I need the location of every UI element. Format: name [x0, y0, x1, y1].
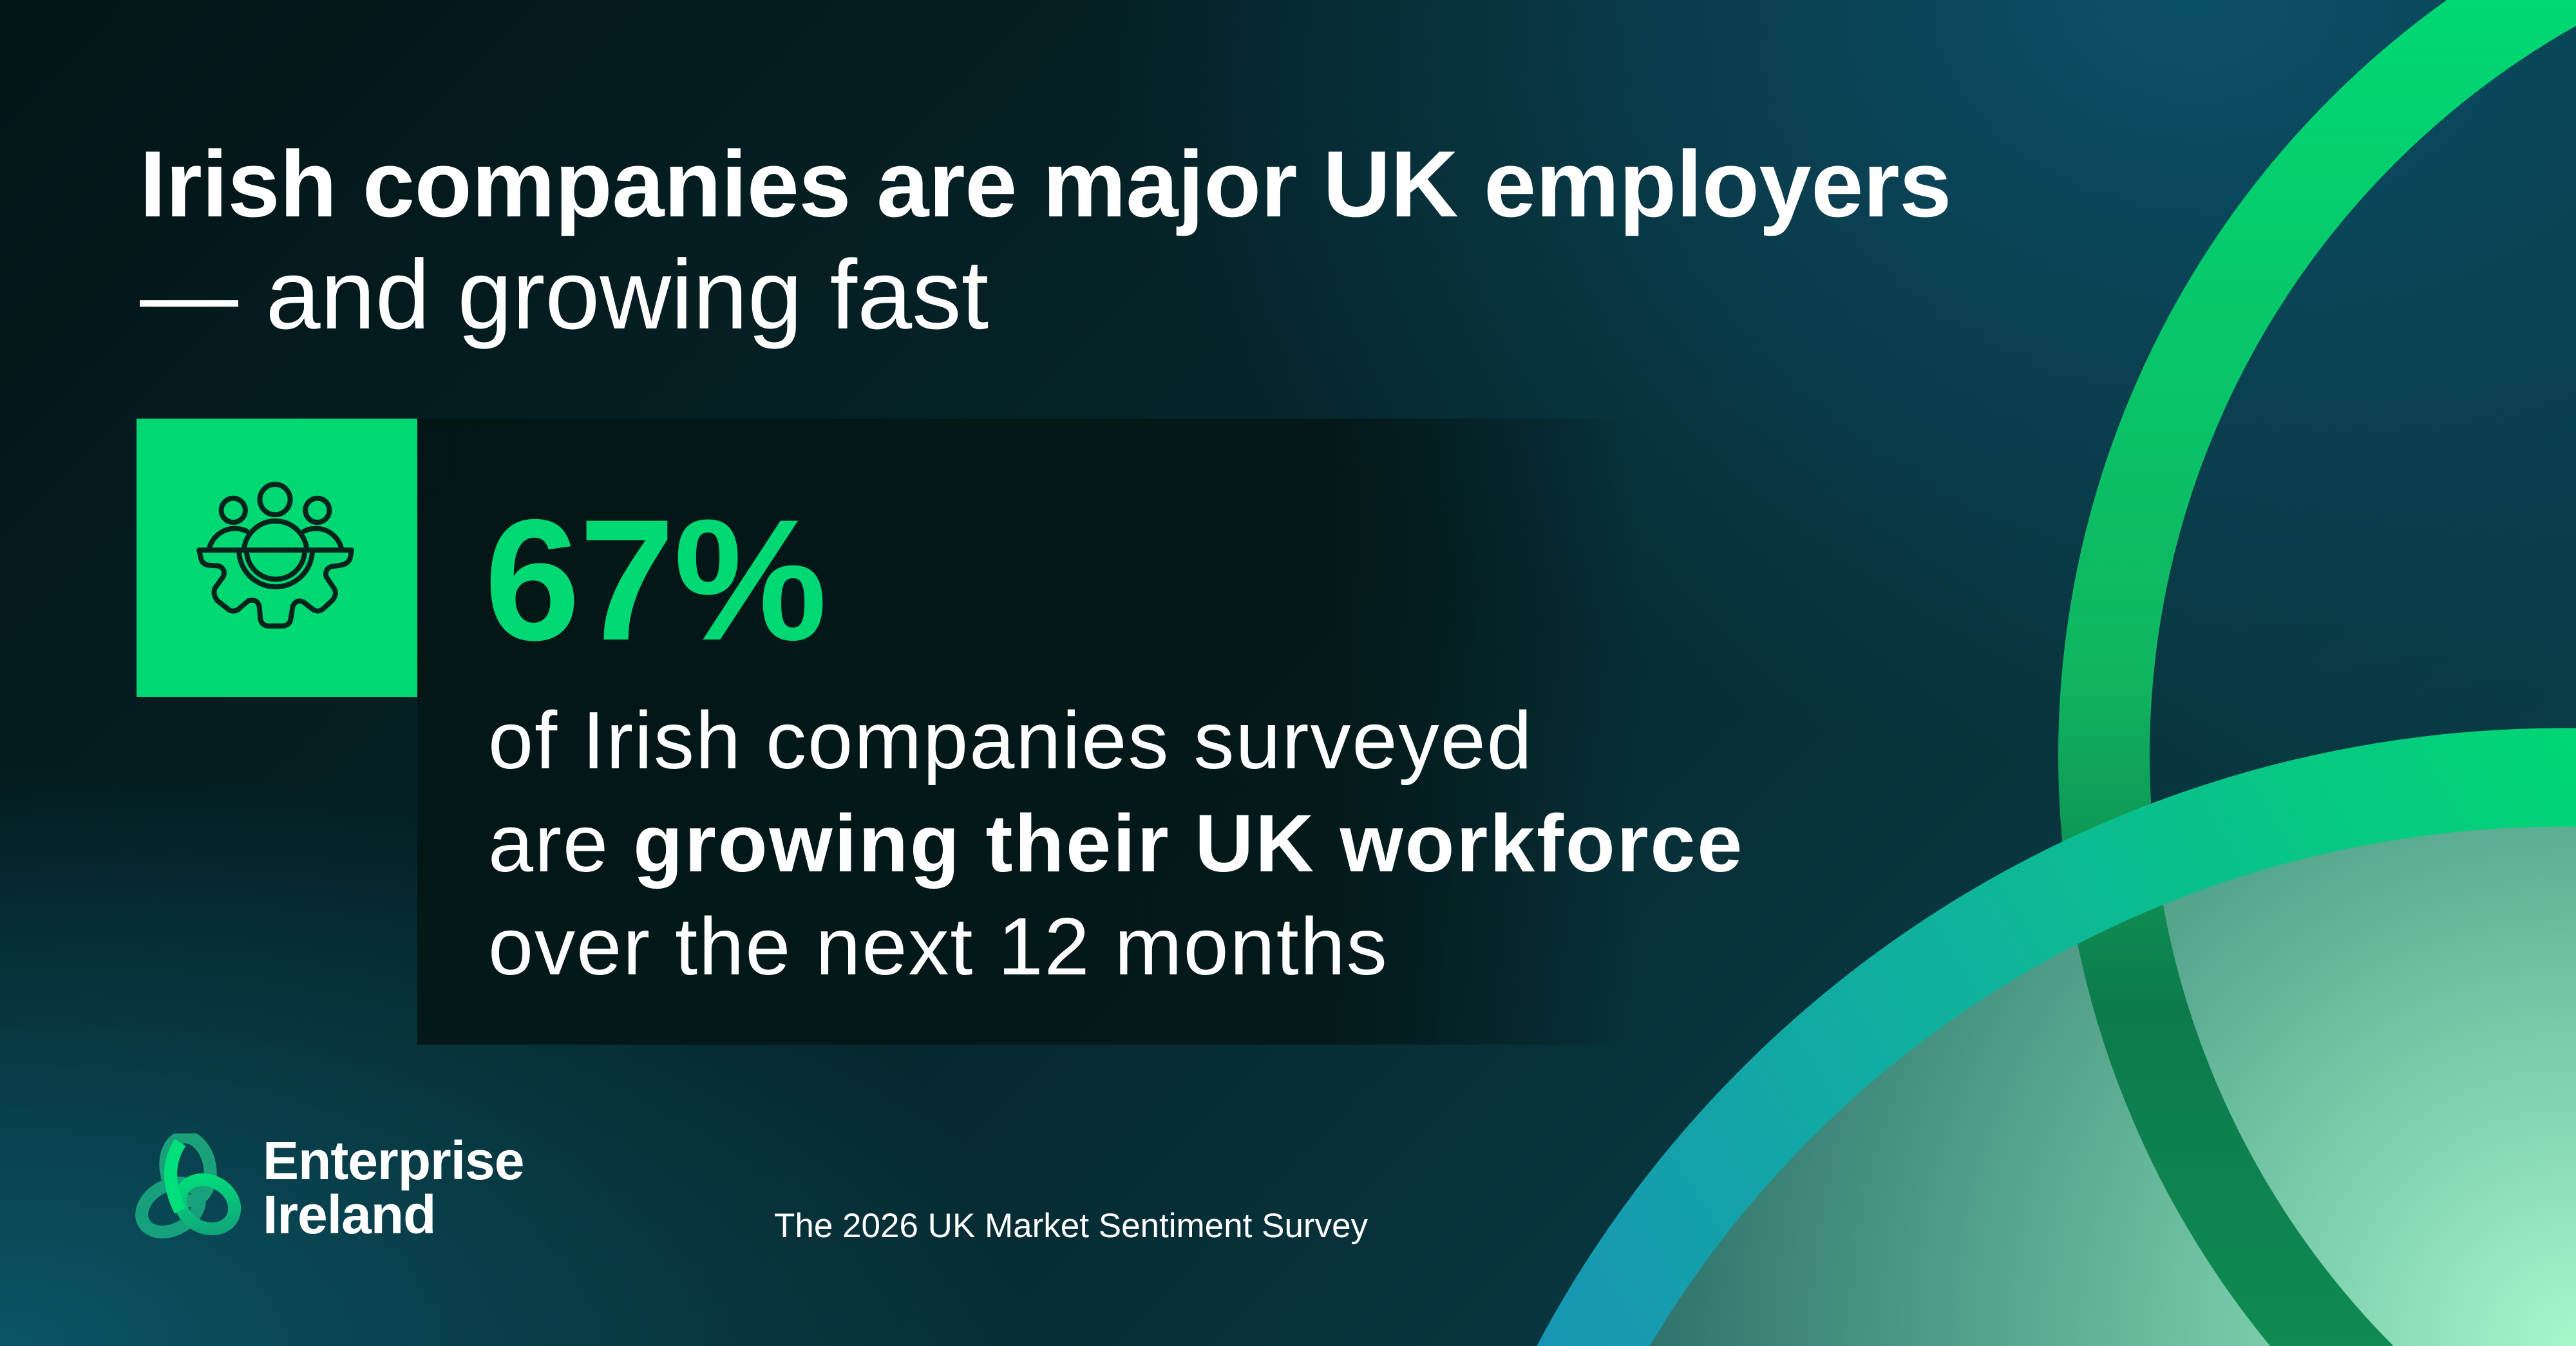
- title: — and growing fast: [140, 240, 989, 350]
- statistic description: over the next 12 months: [488, 901, 1388, 992]
- title: Irish companies are major UK employers: [140, 131, 1951, 236]
- icon: trinity knot: [135, 1133, 241, 1238]
- logo text: Ireland: [263, 1184, 435, 1245]
- title: [140, 131, 1951, 350]
- logo text: Enterprise: [263, 1130, 524, 1191]
- logo: Enterprise Ireland: [135, 1130, 524, 1245]
- big number: 67%: [484, 483, 826, 676]
- statistic description: [488, 695, 1744, 992]
- icon: people with gear: [137, 419, 417, 697]
- statistic description: of Irish companies surveyed: [488, 695, 1533, 786]
- footer source: The 2026 UK Market Sentiment Survey: [774, 1207, 1368, 1245]
- panel: statistic: [417, 419, 1641, 1045]
- logo text: [263, 1130, 524, 1245]
- statistic description: are growing their UK workforce: [488, 798, 1744, 889]
